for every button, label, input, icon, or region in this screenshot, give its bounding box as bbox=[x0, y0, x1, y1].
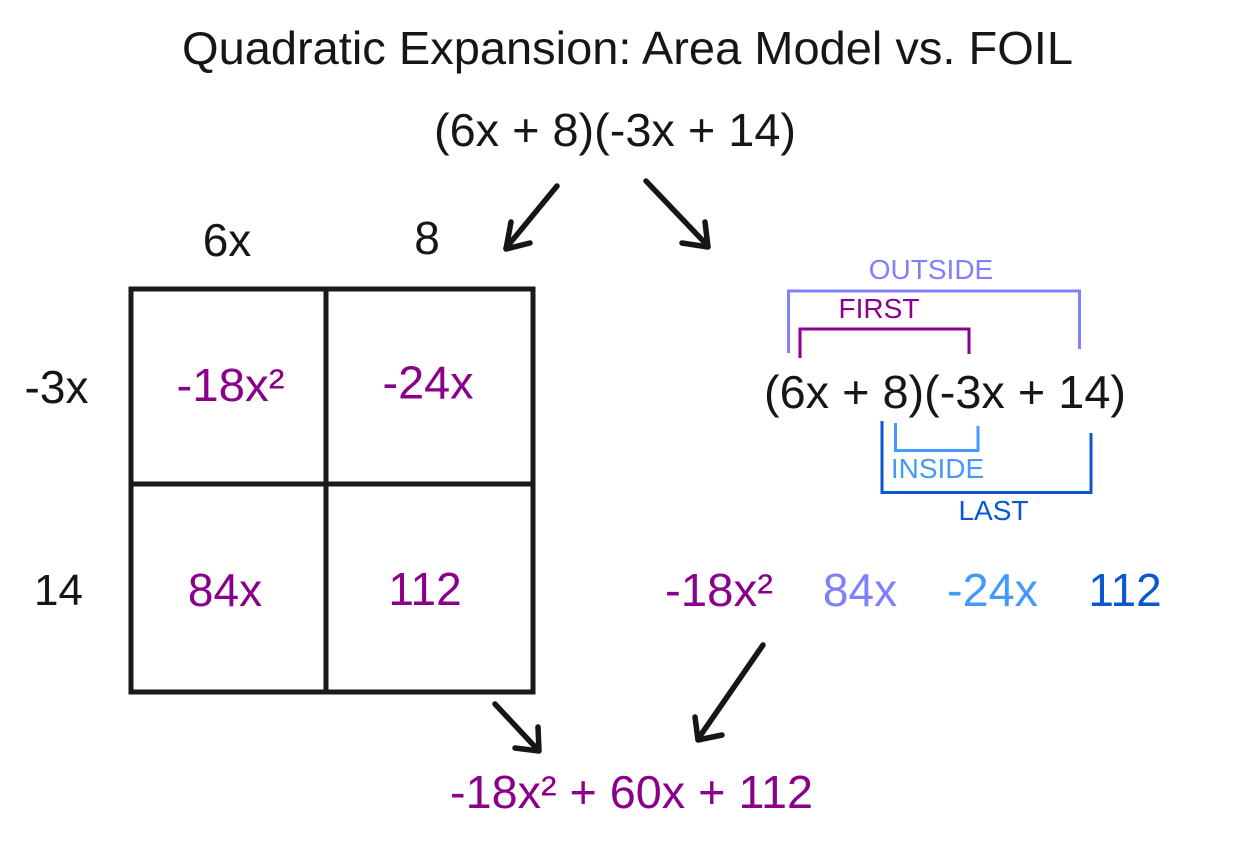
top expression: (6x + 8)(-3x + 14) bbox=[434, 104, 796, 156]
column labels: 8 bbox=[414, 212, 440, 264]
row labels bbox=[25, 361, 88, 615]
cell values bbox=[176, 356, 474, 616]
column labels bbox=[203, 212, 440, 266]
last bracket: LAST bbox=[958, 495, 1029, 526]
title: Quadratic Expansion: Area Model vs. FOIL bbox=[182, 22, 1073, 74]
row labels: 14 bbox=[34, 566, 83, 615]
outside bracket bbox=[788, 254, 1080, 353]
cell values: -18x² bbox=[176, 359, 284, 411]
FOIL terms: -24x bbox=[947, 564, 1038, 616]
arrow: FOIL to result bbox=[695, 645, 763, 740]
FOIL terms: 84x bbox=[823, 564, 897, 616]
area model bbox=[25, 212, 533, 692]
FOIL terms bbox=[665, 564, 1162, 616]
last bracket bbox=[882, 421, 1091, 526]
FOIL terms: -18x² bbox=[665, 564, 773, 616]
cell values: 112 bbox=[388, 563, 462, 615]
row labels: -3x bbox=[25, 361, 88, 413]
arrow: to area model bbox=[506, 186, 557, 249]
grid bbox=[129, 289, 533, 692]
arrow: area model to result bbox=[495, 704, 539, 751]
FOIL diagram bbox=[665, 254, 1162, 616]
first bracket: FIRST bbox=[839, 293, 919, 324]
result: -18x² + 60x + 112 bbox=[450, 766, 813, 818]
FOIL terms: 112 bbox=[1088, 564, 1162, 616]
column labels: 6x bbox=[203, 214, 251, 266]
first bracket bbox=[800, 293, 969, 358]
cell values: 84x bbox=[188, 564, 262, 616]
cell values: -24x bbox=[382, 356, 474, 408]
inside bracket bbox=[891, 423, 984, 484]
arrow: to FOIL bbox=[646, 181, 708, 247]
FOIL expression: (6x + 8)(-3x + 14) bbox=[764, 366, 1126, 418]
inside bracket: INSIDE bbox=[891, 453, 984, 484]
outside bracket: OUTSIDE bbox=[869, 254, 993, 285]
